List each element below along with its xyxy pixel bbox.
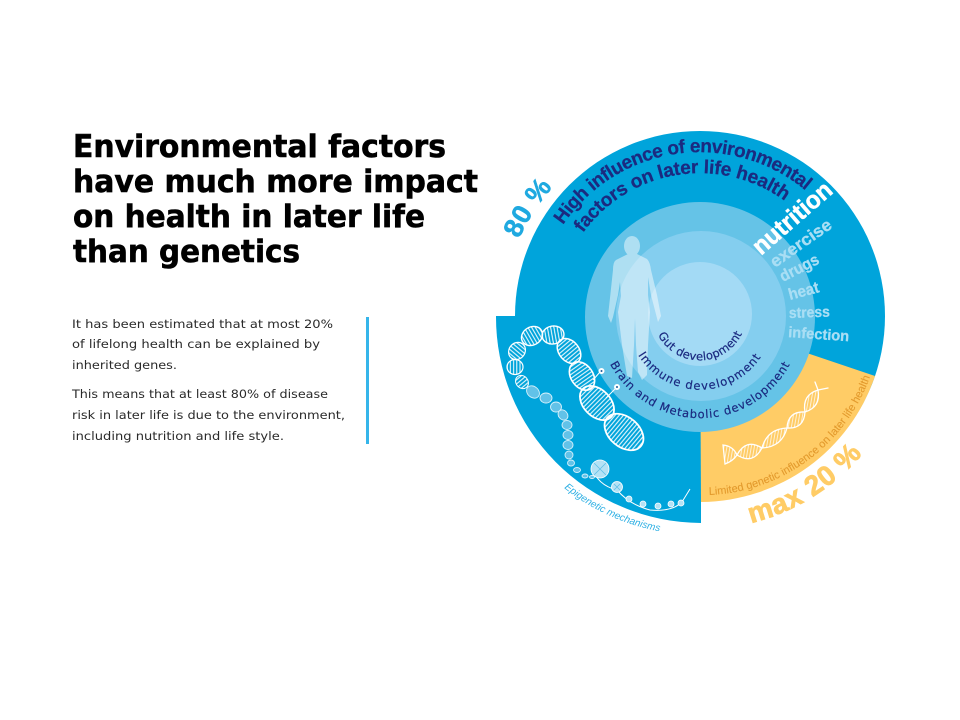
icon: fading DNA beads bbox=[524, 383, 594, 478]
list: environmental factors: exercise bbox=[766, 215, 835, 271]
list: environmental factors bbox=[747, 176, 850, 345]
body text: including nutrition and life style. bbox=[72, 429, 284, 443]
body text: risk in later life is due to the environment, bbox=[72, 408, 345, 422]
title: than genetics bbox=[73, 234, 300, 270]
panel: epigenetic sector bbox=[496, 316, 701, 523]
list: environmental factors: stress bbox=[789, 304, 830, 322]
icon: epigenetic DNA chain bbox=[505, 323, 650, 458]
ring: gut bbox=[648, 262, 752, 366]
body text: inherited genes. bbox=[72, 358, 177, 372]
curved label: gut development: Gut development bbox=[659, 330, 742, 361]
icon: DNA markers bbox=[593, 368, 620, 398]
panel: environmental circle bbox=[515, 131, 885, 501]
curved heading: high influence: factors on later life health bbox=[574, 159, 788, 232]
accent bar bbox=[366, 317, 369, 444]
ring: immune bbox=[616, 231, 786, 401]
list: environmental factors: nutrition bbox=[747, 176, 838, 261]
list: environmental factors: drugs bbox=[777, 251, 822, 286]
title: have much more impact bbox=[73, 164, 478, 200]
icon: genetic DNA helix bbox=[723, 382, 828, 464]
body text: of lifelong health can be explained by bbox=[72, 337, 320, 351]
title bbox=[73, 129, 478, 270]
stat: max 20 percent: max 20 % bbox=[748, 444, 861, 524]
body text: This means that at least 80% of disease bbox=[71, 387, 328, 401]
icon: nucleosome strand bbox=[591, 460, 690, 510]
curved label: brain and metabolic development: Brain and Metabolic development bbox=[610, 360, 790, 418]
title: Environmental factors bbox=[73, 129, 446, 165]
curved label: immune development: Immune development bbox=[638, 351, 761, 390]
body text: It has been estimated that at most 20% bbox=[72, 317, 333, 331]
stat: 80 percent: 80 % bbox=[504, 178, 551, 237]
curved label: epigenetic mechanisms: Epigenetic mechanisms bbox=[564, 484, 660, 531]
curved label: limited genetic influence: Limited genetic influence on later life health bbox=[710, 376, 870, 495]
body text bbox=[71, 317, 345, 443]
icon: human figure bbox=[608, 236, 661, 380]
panel: genetic sector bbox=[700, 317, 875, 502]
title: on health in later life bbox=[73, 199, 425, 235]
curved heading: high influence: High influence of environmental bbox=[553, 139, 814, 224]
ring: brain and metabolic bbox=[585, 202, 815, 432]
list: environmental factors: infection bbox=[788, 324, 850, 345]
list: environmental factors: heat bbox=[787, 279, 822, 304]
